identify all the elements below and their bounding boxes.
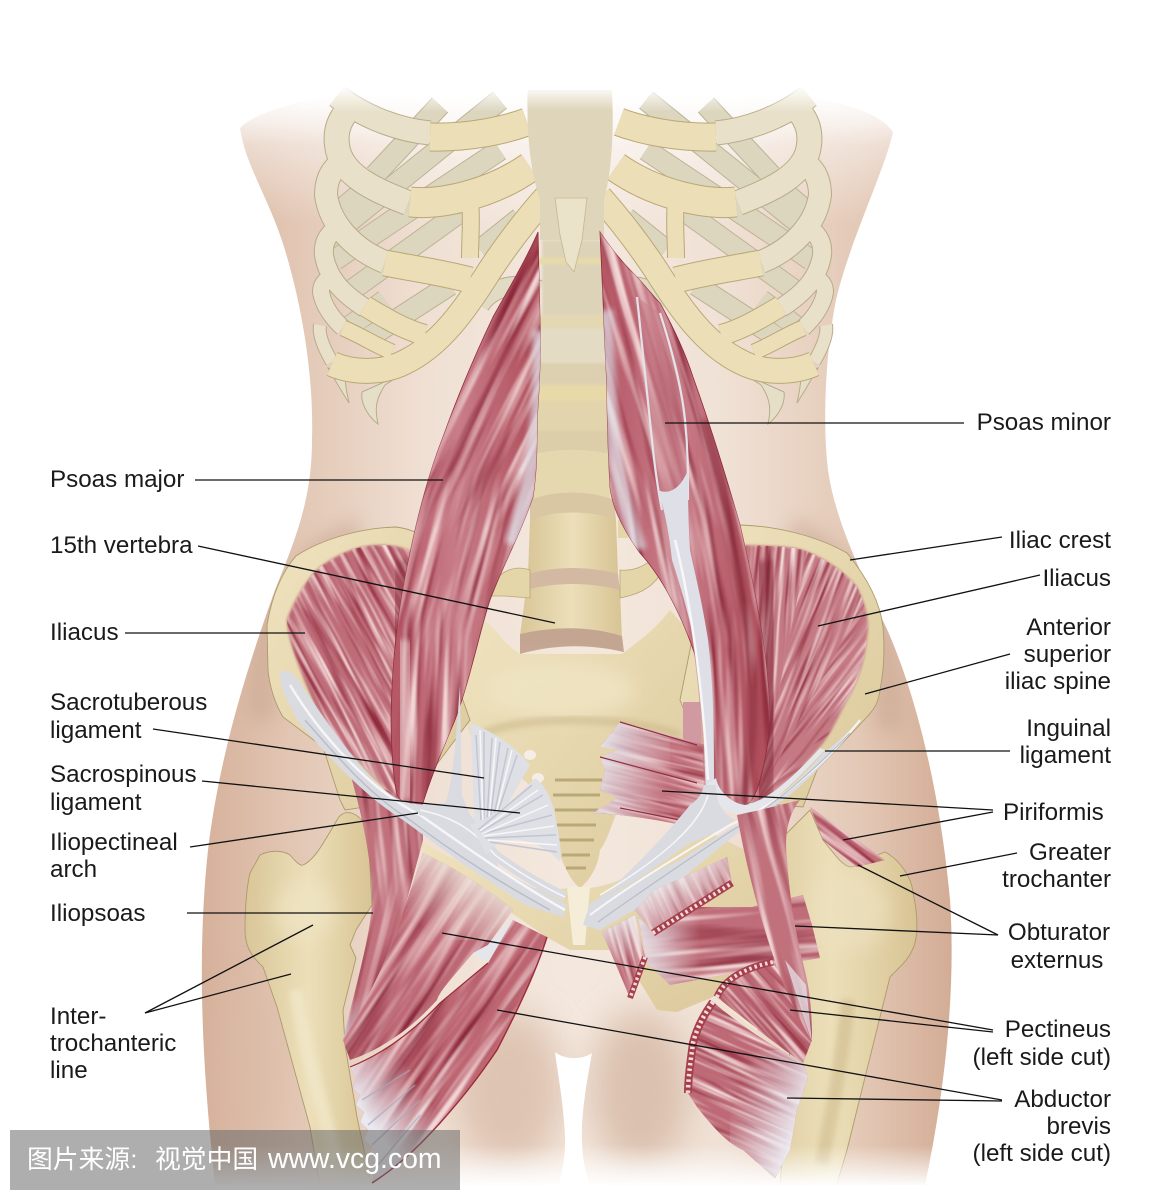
iliopsoas lower right <box>737 800 812 1042</box>
adductor longus left <box>350 920 548 1184</box>
label: Sacrotuberous ligament: Sacrotuberous <box>50 689 207 716</box>
pelvis: right ilium <box>680 525 884 807</box>
watermark: www.vcg.com <box>267 1143 442 1175</box>
label: Greater trochanter: trochanter <box>1002 866 1111 893</box>
label: Abductor brevis (left side cut): Abductor <box>1014 1086 1111 1113</box>
label: Sacrotuberous ligament: ligament <box>50 717 142 744</box>
label: Psoas major: Psoas major <box>50 466 184 493</box>
label: Anterior superior iliac spine: iliac spine <box>1005 668 1111 695</box>
inguinal ligament and iliopectineal arch left <box>280 671 567 917</box>
label: Iliopsoas: Iliopsoas <box>50 900 145 927</box>
sacrotuberous ligament fan <box>470 723 530 825</box>
white tendon patch <box>473 917 513 962</box>
label: Iliopectineal arch: Iliopectineal <box>50 829 178 856</box>
femur left <box>245 813 372 1187</box>
label: Sacrospinous ligament: ligament <box>50 789 142 816</box>
pubic bones <box>420 825 760 1012</box>
sternum and xiphoid <box>528 86 618 272</box>
psoas minor and broad tendon <box>637 297 714 790</box>
label: Anterior superior iliac spine: Anterior <box>1026 614 1111 641</box>
watermark: 视觉中国 <box>155 1145 258 1174</box>
pelvis: left ilium <box>267 527 470 810</box>
label: Inter-trochanteric line: line <box>50 1057 88 1084</box>
label: Iliopectineal arch: arch <box>50 856 97 883</box>
iliopsoas lower left <box>343 779 423 1040</box>
sacrospinous ligament fan <box>470 778 561 862</box>
body silhouette <box>200 85 952 1190</box>
label: Iliacus right: Iliacus <box>1042 565 1111 592</box>
spine <box>490 240 660 654</box>
ribcage left <box>320 96 546 424</box>
cut muscle piece <box>635 857 734 936</box>
label: Obturator externus: externus <box>1011 947 1103 974</box>
pectineus right cut <box>602 915 648 999</box>
obturator externus right <box>638 895 820 985</box>
psoas major left <box>390 232 541 804</box>
label: Pectineus (left side cut): (left side cut) <box>973 1044 1111 1071</box>
pectineus left <box>343 853 513 1060</box>
watermark: 图片来源: <box>27 1145 137 1174</box>
label: Anterior superior iliac spine: superior <box>1024 641 1111 668</box>
label: Pectineus (left side cut): Pectineus <box>1005 1016 1111 1043</box>
label: Iliac crest: Iliac crest <box>1009 527 1111 554</box>
inguinal ligament and broad tendon hub right <box>583 717 863 930</box>
leader lines <box>125 423 1040 1101</box>
bottom fade of bones and skin <box>190 1145 970 1187</box>
ribcage right <box>600 96 826 424</box>
piriformis lateral <box>810 807 885 867</box>
label: Sacrospinous ligament: Sacrospinous <box>50 761 197 788</box>
label: Inguinal ligament: Inguinal <box>1026 715 1111 742</box>
femur right <box>745 810 917 1187</box>
iliacus right <box>745 544 870 803</box>
label: 15th vertebra: 15th vertebra <box>50 532 193 559</box>
label: Inter-trochanteric line: trochanteric <box>50 1030 176 1057</box>
pelvis: sacrum <box>460 610 705 888</box>
label: Abductor brevis (left side cut): brevis <box>1046 1113 1111 1140</box>
label: Inguinal ligament: ligament <box>1020 742 1111 769</box>
psoas major right <box>600 230 770 805</box>
iliacus left <box>286 543 410 795</box>
label: Abductor brevis (left side cut): (left side cut) <box>973 1140 1111 1167</box>
abductor brevis right <box>684 1000 808 1178</box>
label: Greater trochanter: Greater <box>1029 839 1111 866</box>
label: Psoas minor: Psoas minor <box>977 409 1111 436</box>
crotch gap <box>555 1052 592 1190</box>
label: Obturator externus: Obturator <box>1008 919 1110 946</box>
watermark <box>10 1130 460 1190</box>
label: Piriformis: Piriformis <box>1003 799 1104 826</box>
piriformis medial <box>593 702 706 824</box>
adductor upper right <box>714 958 812 1063</box>
label: Inter-trochanteric line: Inter- <box>50 1003 106 1030</box>
label: Iliacus left: Iliacus <box>50 619 119 646</box>
